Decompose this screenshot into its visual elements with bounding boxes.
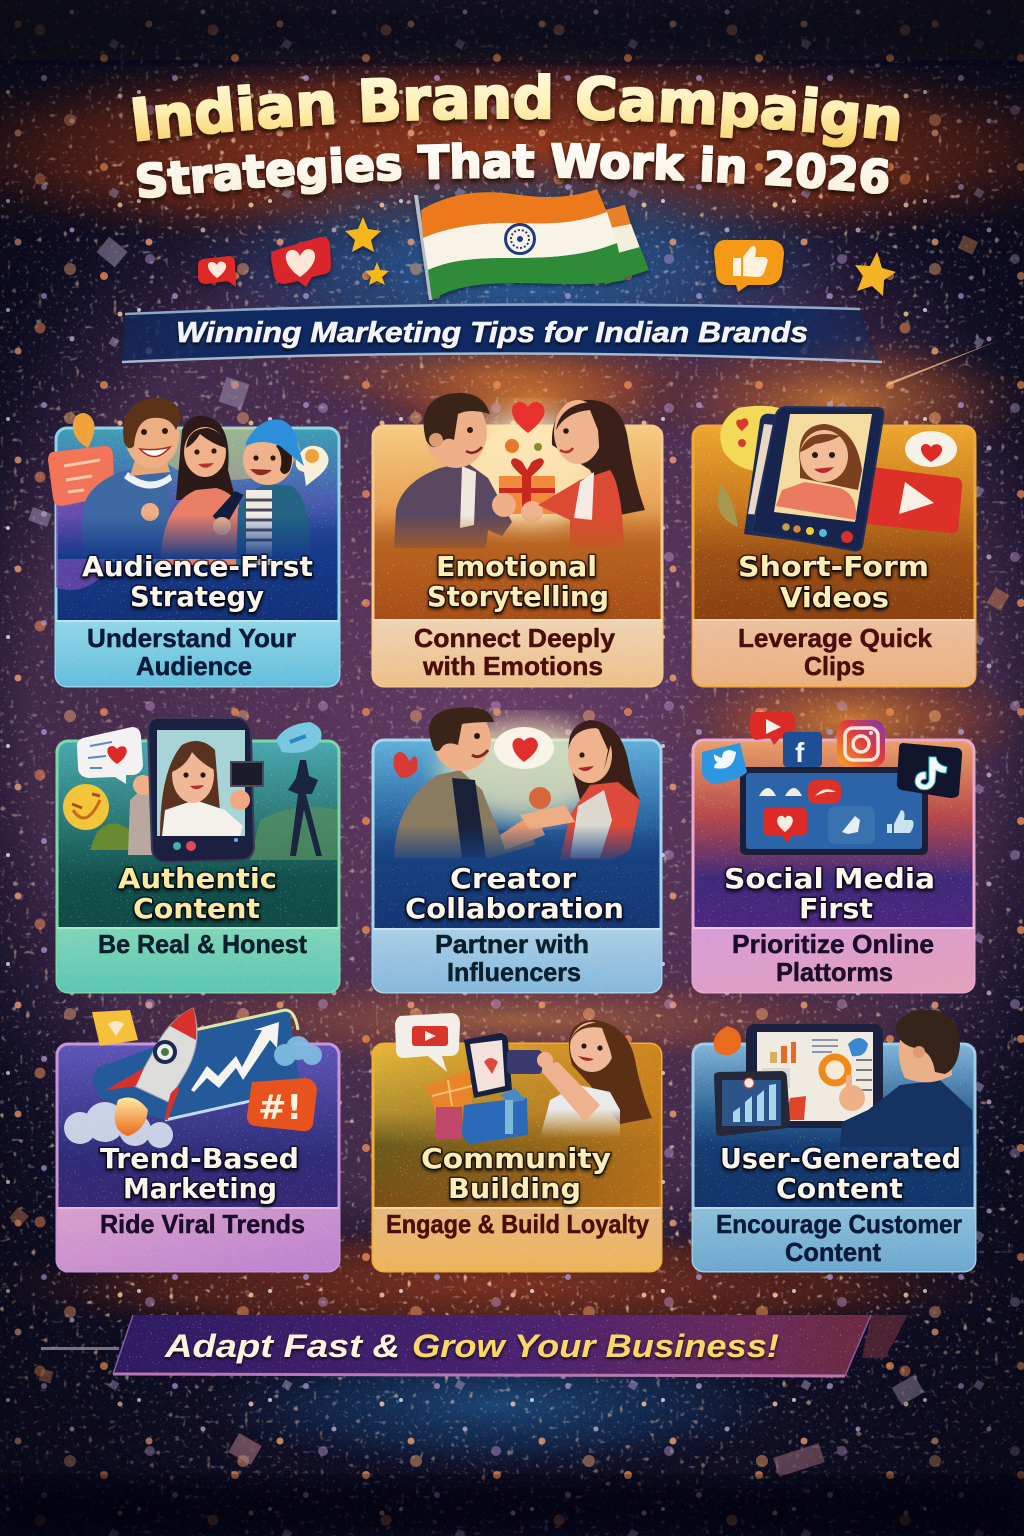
caption: understand your audience: Understand Your	[87, 625, 296, 653]
panel: audience-first strategy	[20, 398, 339, 687]
caption: encourage customer content: Content	[785, 1239, 881, 1267]
caption: partner with influencers	[435, 931, 589, 987]
caption: connect deeply with emotions	[414, 625, 616, 681]
heading: authentic content: Authentic	[118, 862, 277, 895]
caption: prioritize online platforms: Plattorms	[776, 959, 893, 987]
heading: social media first	[724, 862, 935, 925]
heading: trend-based marketing	[100, 1142, 299, 1205]
illustration: selfie phone and tripod	[63, 718, 337, 862]
heading: trend-based marketing: Trend-Based	[100, 1142, 299, 1175]
heading: audience-first strategy	[82, 550, 313, 613]
caption: encourage customer content	[716, 1211, 962, 1267]
caption: prioritize online platforms: Prioritize Online	[732, 931, 934, 959]
caption: engage and build loyalty: Engage & Build Loyalty	[386, 1211, 650, 1239]
fade: figures into card	[375, 825, 659, 866]
caption: connect deeply with emotions: Connect Deeply	[414, 625, 616, 653]
sub-panel: authentic tagline	[57, 741, 339, 992]
heading: community building: Community	[421, 1142, 611, 1175]
heading: creator collaboration	[405, 862, 624, 925]
illustration: social app tiles on tablet: f	[795, 737, 805, 768]
heading: trend-based marketing: Marketing	[123, 1172, 277, 1205]
icon: small heart bubble	[198, 256, 236, 287]
caption: understand your audience	[87, 625, 296, 681]
icon: large heart bubble	[271, 237, 331, 287]
heading: authentic content: Content	[133, 892, 260, 925]
sub-panel: trend tagline	[57, 1044, 339, 1271]
illustration: rocket and rising chart: #!	[258, 1088, 302, 1128]
caption: prioritize online platforms	[732, 931, 934, 987]
caption: understand your audience: Audience	[136, 653, 252, 681]
sub-panel: social tagline	[693, 740, 974, 992]
comet streak	[885, 340, 1000, 387]
heading: community building	[421, 1142, 611, 1205]
subtitle ribbon: Winning Marketing Tips for Indian Brands	[176, 317, 808, 349]
illustration: rocket and rising chart	[64, 1008, 322, 1148]
caption: leverage quick clips: Leverage Quick	[738, 625, 933, 653]
panel: social media first	[693, 712, 974, 992]
panel: user-generated content	[693, 1010, 975, 1271]
heading: social media first: Social Media	[724, 862, 935, 895]
panel: trend-based marketing	[57, 1008, 339, 1271]
sub-panel: short-form tagline	[693, 426, 975, 686]
heading: creator collaboration: Collaboration	[405, 892, 624, 925]
sub-panel: community tagline	[373, 1044, 661, 1271]
panel: creator collaboration	[373, 707, 661, 992]
illustration: phones with video clips	[718, 406, 962, 550]
heading: authentic content	[118, 862, 277, 925]
caption: partner with influencers: Influencers	[447, 959, 581, 987]
heading: user-generated content: User-Generated	[720, 1142, 961, 1175]
caption: partner with influencers: Partner with	[435, 931, 589, 959]
icon: thumbs up bubble	[714, 240, 784, 292]
caption: leverage quick clips: Clips	[804, 653, 865, 681]
panel: community building	[373, 1013, 661, 1271]
icon: gold star right	[855, 252, 896, 296]
caption: leverage quick clips	[738, 625, 933, 681]
heading: creator collaboration: Creator	[450, 862, 576, 895]
panel: short-form videos	[693, 406, 975, 686]
illustration: couple exchanging gift	[394, 393, 645, 548]
call to action banner: Adapt Fast &	[164, 1328, 400, 1364]
subtitle ribbon	[122, 305, 882, 362]
caption: connect deeply with emotions: with Emotions	[422, 653, 603, 681]
sub-panel: audience-first tagline	[56, 428, 339, 686]
caption: encourage customer content: Encourage Customer	[716, 1211, 962, 1239]
illustration: social app tiles on tablet	[702, 712, 962, 855]
icon: indian flag	[414, 189, 649, 300]
icon: gold stars	[345, 217, 389, 285]
caption: be real and honest: Be Real & Honest	[98, 931, 307, 959]
illustration: woman filming with shopping bags	[395, 1013, 652, 1144]
heading: emotional storytelling: Emotional	[436, 550, 597, 583]
sub-panel: emotional tagline	[373, 426, 662, 686]
fade: figures into card	[58, 515, 337, 559]
title: Indian Brand Campaign	[130, 73, 902, 154]
heading: short-form videos: Short-Form	[738, 550, 929, 583]
sub-panel: creator tagline	[373, 740, 661, 992]
heading: audience-first strategy: Strategy	[130, 580, 264, 613]
heading: user-generated content: Content	[776, 1172, 903, 1205]
heading: audience-first strategy: Audience-First	[82, 550, 313, 583]
heading: emotional storytelling	[427, 550, 609, 613]
heading: community building: Building	[448, 1172, 581, 1205]
illustration: creator handshake	[393, 707, 640, 860]
caption: ride viral trends: Ride Viral Trends	[100, 1211, 305, 1239]
heading: short-form videos	[738, 550, 929, 614]
sub-panel: user-generated tagline	[693, 1044, 975, 1271]
illustration: analyst reviewing dashboard	[714, 1010, 972, 1147]
illustration: three friends with phone	[48, 398, 329, 565]
heading: user-generated content	[720, 1142, 961, 1205]
heading: social media first: First	[799, 892, 873, 925]
heading: emotional storytelling: Storytelling	[427, 580, 609, 613]
title: Strategies That Work in 2026	[134, 142, 892, 204]
title	[130, 73, 902, 204]
call to action banner: Grow Your Business!	[412, 1328, 779, 1364]
fade: couple into card	[375, 515, 660, 561]
heading: short-form videos: Videos	[780, 581, 889, 614]
panel: emotional storytelling	[373, 393, 662, 686]
panel: authentic content	[57, 718, 339, 992]
call to action banner	[41, 1315, 908, 1376]
